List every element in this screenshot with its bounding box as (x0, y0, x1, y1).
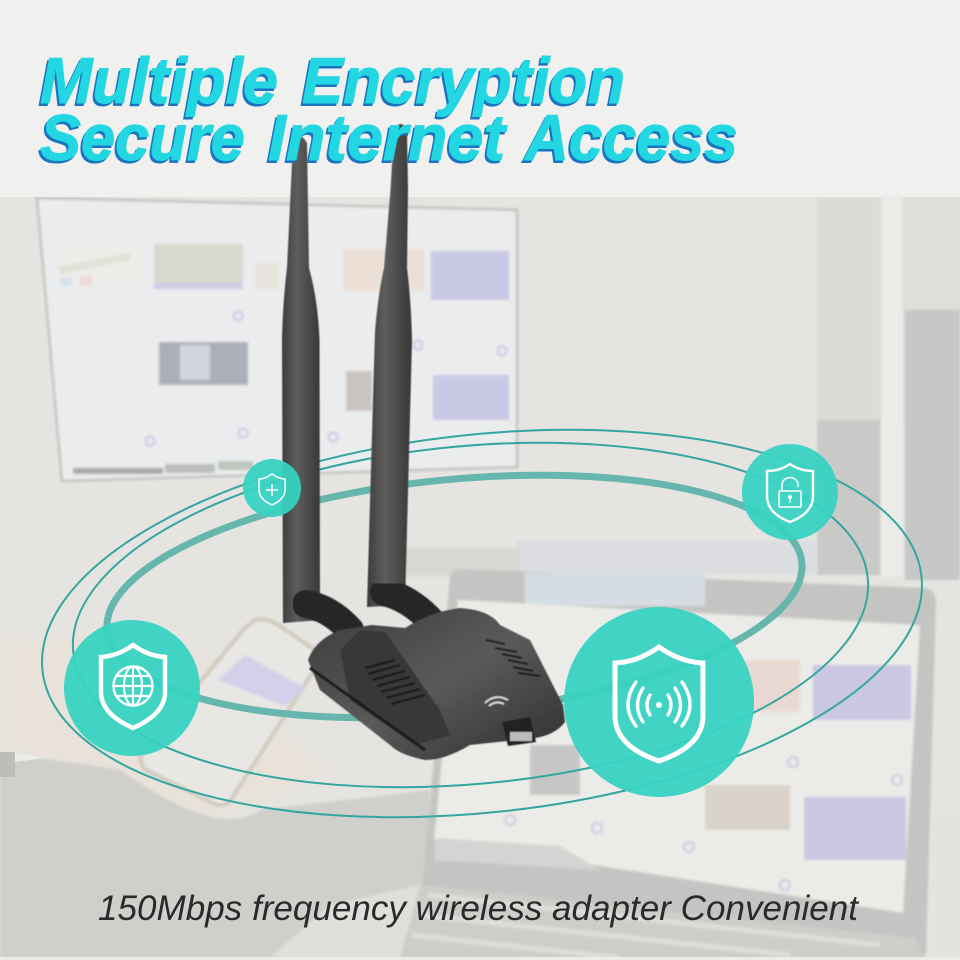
antenna: left (282, 136, 320, 623)
phone in hand (141, 619, 320, 805)
icon: wireless signal shield badge (564, 607, 754, 797)
title: Secure (40, 101, 245, 174)
monitor on the wall (37, 198, 517, 481)
title: Encryption (302, 44, 625, 117)
icon: plus shield badge (243, 459, 301, 517)
hand and arm (0, 638, 330, 830)
bottom-left surface (0, 752, 430, 960)
title (38, 44, 738, 176)
title: Multiple (40, 44, 278, 117)
title: Multiple (38, 46, 276, 120)
adapter body (306, 592, 565, 760)
orbit rings (22, 389, 942, 858)
antenna: right (367, 124, 412, 607)
title: Access (523, 101, 738, 174)
title: Internet (268, 101, 507, 174)
icon: padlock shield badge (742, 444, 838, 540)
title: Encryption (300, 46, 623, 120)
icon: globe shield badge (64, 620, 200, 756)
title: Secure (38, 104, 243, 176)
title: Internet (266, 104, 505, 176)
caption: 150Mbps frequency wireless adapter Convenient (98, 889, 859, 928)
laptop (400, 569, 936, 960)
title: Access (521, 104, 736, 176)
